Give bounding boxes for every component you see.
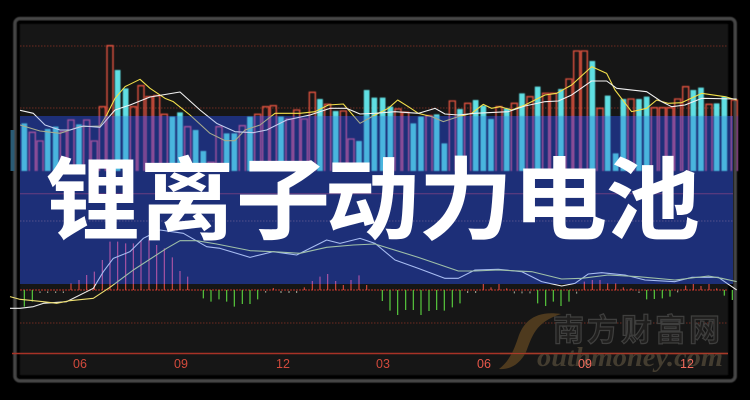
x axis labels [73, 357, 694, 371]
title: 锂 [46, 150, 140, 252]
x axis labels: 12 [680, 357, 694, 371]
moving average lines [12, 67, 737, 141]
title: 离 [140, 150, 234, 252]
blue title band [20, 116, 733, 284]
title [46, 150, 700, 252]
candlestick panel grid lines [20, 46, 728, 323]
MACD histogram [24, 240, 732, 315]
watermark swirl S [499, 313, 561, 369]
x axis labels: 12 [276, 357, 290, 371]
x axis labels: 06 [73, 357, 87, 371]
partial bar outside frame [10, 130, 14, 171]
watermark: Southmoney logo [499, 313, 723, 372]
x axis labels: 03 [376, 357, 390, 371]
title: 子 [236, 150, 330, 252]
bar chart: volume bars [24, 46, 737, 171]
title: 动 [325, 150, 419, 252]
MACD signal lines [10, 230, 737, 308]
title: 电 [513, 150, 607, 252]
watermark latin name: outhmoney.com [537, 342, 723, 372]
watermark Chinese name: 南方财富网 [553, 313, 720, 348]
title: 池 [606, 150, 700, 252]
bottom axis redraw over watermark [500, 352, 728, 354]
band grid lines [12, 194, 733, 354]
x axis labels: 06 [477, 357, 491, 371]
x axis labels: 09 [578, 357, 592, 371]
x axis labels: 09 [174, 357, 188, 371]
title: 力 [419, 150, 513, 252]
